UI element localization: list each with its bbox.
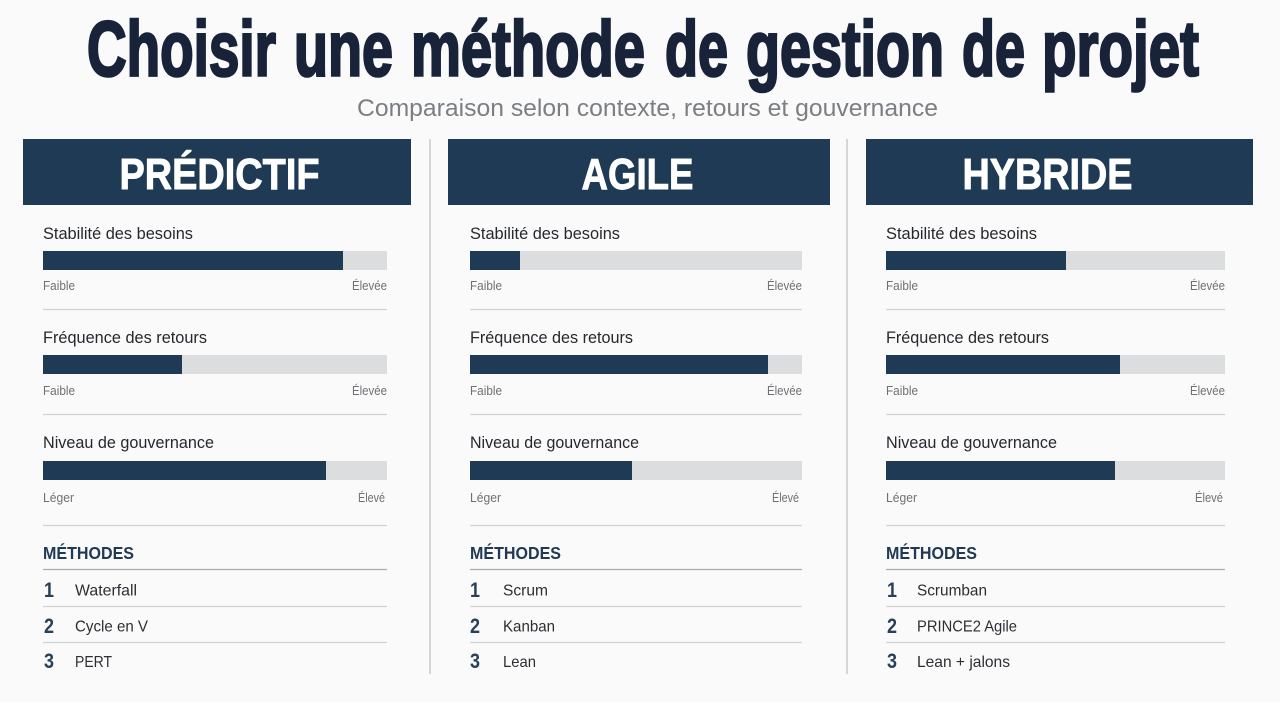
methods list: hybride: PRINCE2 Agile: [917, 618, 1017, 636]
gauge: niveau de gouvernance: Niveau de gouvernance: [886, 434, 1057, 452]
title: de: [962, 4, 1025, 92]
methods list: hybride: MÉTHODES: [886, 542, 977, 563]
methods list: prédictif: PERT: [75, 654, 112, 671]
gauge: fréquence des retours: Élevée: [1190, 383, 1225, 398]
methods list: hybride: Scrumban: [917, 582, 987, 600]
methods list: hybride: 2: [887, 615, 897, 638]
gauge: stabilité des besoins: [470, 225, 802, 293]
gauge: niveau de gouvernance: [470, 434, 802, 505]
title: une: [294, 4, 393, 92]
gauge: stabilité des besoins: Faible: [886, 279, 918, 293]
methods list: prédictif: 1: [44, 579, 54, 602]
methods list: prédictif: 3: [44, 650, 54, 673]
header: prédictif: PRÉDICTIF: [120, 149, 320, 199]
methods list: prédictif: MÉTHODES: [43, 542, 134, 563]
title: gestion: [746, 4, 944, 92]
gauge: stabilité des besoins: Faible: [43, 279, 75, 293]
gauge: niveau de gouvernance: [43, 434, 387, 505]
methods list: prédictif: Cycle en V: [75, 618, 148, 636]
gauge: stabilité des besoins: Stabilité des besoins: [886, 225, 1037, 243]
gauge: fréquence des retours: [470, 329, 802, 398]
header: hybride: [866, 139, 1253, 205]
methods list: agile: MÉTHODES: [470, 542, 561, 563]
gauge: fréquence des retours: Faible: [886, 384, 918, 398]
panel: hybride: [866, 139, 1253, 673]
gauge: fréquence des retours: Fréquence des retours: [470, 329, 633, 347]
gauge: fréquence des retours: Faible: [43, 384, 75, 398]
header: prédictif: [23, 139, 411, 205]
title: projet: [1042, 4, 1199, 92]
methods list: agile: 2: [470, 615, 480, 638]
methods list: prédictif: [43, 542, 387, 673]
gauge: stabilité des besoins: Stabilité des besoins: [470, 225, 620, 243]
gauge: niveau de gouvernance: Niveau de gouvernance: [43, 434, 214, 452]
methods list: prédictif: 2: [44, 615, 54, 638]
gauge: fréquence des retours: Fréquence des retours: [886, 329, 1049, 347]
gauge: fréquence des retours: [43, 329, 387, 398]
panel: agile: [448, 139, 830, 673]
title: de: [665, 4, 728, 92]
gauge: niveau de gouvernance: Léger: [470, 491, 501, 505]
methods list: prédictif: Waterfall: [75, 582, 137, 600]
gauge: niveau de gouvernance: Niveau de gouvernance: [470, 434, 639, 452]
methods list: agile: [470, 542, 802, 673]
gauge: stabilité des besoins: Élevée: [767, 278, 802, 293]
gauge: fréquence des retours: Fréquence des retours: [43, 329, 207, 347]
gauge: stabilité des besoins: Élevée: [352, 278, 387, 293]
methods list: hybride: 3: [887, 650, 897, 673]
gauge: niveau de gouvernance: Léger: [43, 491, 74, 505]
gauge: niveau de gouvernance: Élevé: [358, 490, 385, 505]
gauge: fréquence des retours: [886, 329, 1225, 398]
gauge: fréquence des retours: Élevée: [767, 383, 802, 398]
methods list: agile: Kanban: [503, 618, 555, 636]
methods list: agile: 1: [470, 579, 480, 602]
header: agile: AGILE: [582, 150, 694, 199]
gauge: stabilité des besoins: [43, 225, 387, 293]
methods list: hybride: 1: [887, 579, 897, 602]
subtitle: Comparaison selon contexte, retours et gouvernance: [357, 95, 938, 122]
methods list: hybride: [886, 542, 1225, 673]
gauge: stabilité des besoins: Élevée: [1190, 278, 1225, 293]
header: agile: [448, 139, 830, 205]
methods list: hybride: Lean + jalons: [917, 654, 1010, 671]
title: [87, 4, 1199, 92]
header: hybride: HYBRIDE: [962, 150, 1132, 199]
title: Choisir: [87, 4, 276, 92]
gauge: niveau de gouvernance: Élevé: [1195, 490, 1223, 505]
methods list: agile: 3: [470, 650, 480, 673]
gauge: stabilité des besoins: Stabilité des besoins: [43, 225, 193, 243]
panel: prédictif: [23, 139, 411, 673]
gauge: fréquence des retours: Faible: [470, 384, 502, 398]
gauge: stabilité des besoins: [886, 225, 1225, 293]
gauge: stabilité des besoins: Faible: [470, 279, 502, 293]
gauge: fréquence des retours: Élevée: [352, 383, 387, 398]
methods list: agile: Lean: [503, 654, 536, 671]
title: méthode: [411, 4, 645, 92]
gauge: niveau de gouvernance: [886, 434, 1225, 505]
gauge: niveau de gouvernance: Élevé: [772, 490, 799, 505]
gauge: niveau de gouvernance: Léger: [886, 491, 917, 505]
methods list: agile: Scrum: [503, 582, 548, 600]
